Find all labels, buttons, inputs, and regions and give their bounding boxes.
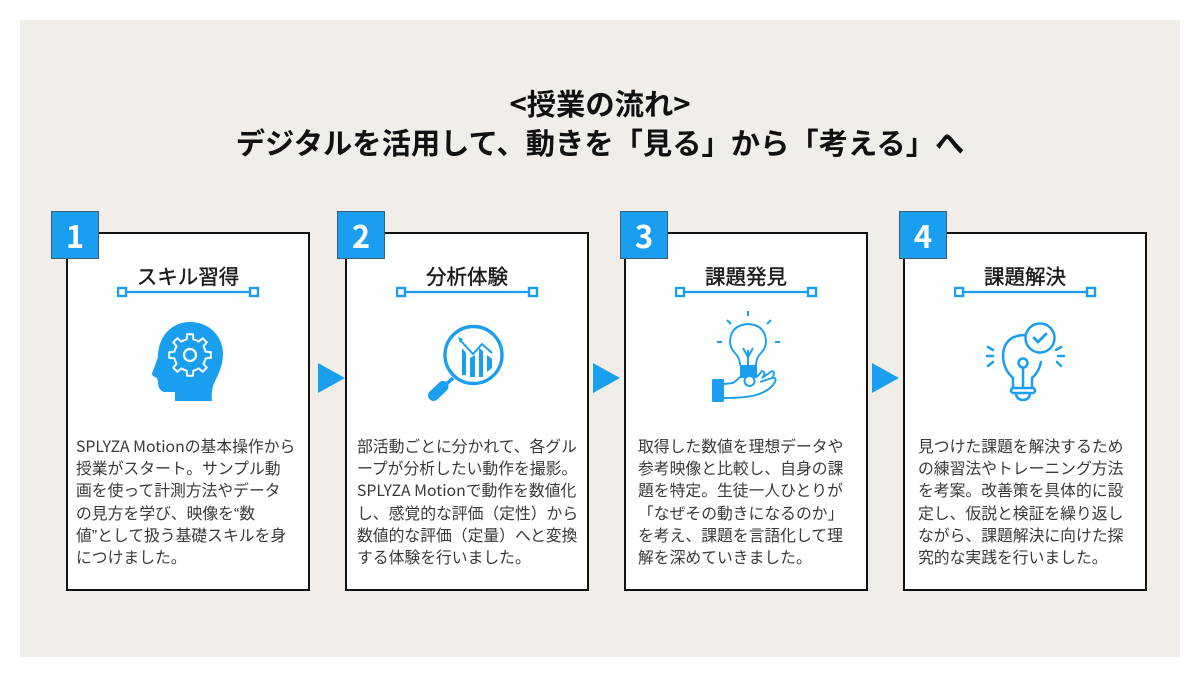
text: step 3: 取得した数値を理想データや (638, 434, 843, 457)
heading: step 4: 課題解決 (984, 260, 1066, 290)
text: step 1 (76, 434, 295, 568)
arrow: 1 to 2 (318, 363, 345, 393)
badge: 3 (620, 211, 668, 259)
heading: step 1: スキル習得 (137, 260, 239, 290)
heading: step 2: 分析体験 (426, 260, 508, 290)
text: step 1: の見方を学び、映像を“数 (76, 501, 255, 524)
panel: step 3 problem discovery (624, 232, 868, 591)
text: step 3: 題を特定。生徒一人ひとりが (638, 478, 843, 501)
text: step 3 (638, 434, 843, 568)
heading: step 3: 課題発見 (705, 260, 787, 290)
text: step 2: 部活動ごとに分かれて、各グル (357, 434, 577, 457)
text: step 4: 見つけた課題を解決するため (918, 434, 1123, 457)
heading rule: step 1 (117, 286, 260, 298)
badge: 2: 2 (352, 212, 370, 257)
text: step 2: SPLYZA Motionで動作を数値化 (357, 478, 576, 501)
badge: 2 (337, 211, 385, 259)
text: step 1: SPLYZA Motionの基本操作から (76, 434, 295, 457)
heading rule: step 4 (954, 286, 1096, 298)
text: step 2 (357, 434, 578, 568)
badge: 1 (51, 211, 99, 259)
text: step 1: 画を使って計測方法やデータ (76, 478, 281, 501)
title line 1: <授業の流れ> (509, 82, 691, 124)
title line 2: デジタルを活用して、動きを「見る」から「考える」へ (236, 121, 964, 163)
badge: 4: 4 (914, 212, 932, 257)
text: step 2: し、感覚的な評価（定性）から (357, 501, 578, 524)
text: step 3: を考え、課題を言語化して理 (638, 523, 843, 546)
text: step 2: ープが分析したい動作を撮影。 (357, 456, 577, 479)
text: step 4: 究的な実践を行いました。 (918, 545, 1108, 568)
text: step 4: を考案。改善策を具体的に設 (918, 478, 1123, 501)
badge: 4 (899, 211, 947, 259)
icon: light bulb in hand (712, 311, 780, 402)
text: step 1: につけました。 (76, 545, 187, 568)
panel: step 1 skill acquisition (66, 232, 310, 591)
text: step 4: ながら、課題解決に向けた探 (918, 523, 1123, 546)
icon: light bulb with check (986, 322, 1066, 402)
text: step 4 (918, 434, 1123, 568)
text: step 2: 数値的な評価（定量）へと変換 (357, 523, 577, 546)
heading rule: step 3 (675, 286, 818, 298)
badge: 1: 1 (66, 212, 84, 257)
text: step 2: する体験を行いました。 (357, 545, 531, 568)
text: step 1: 値”として扱う基礎スキルを身 (76, 523, 286, 546)
icon: magnifier with chart (428, 324, 504, 401)
text: step 4: の練習法やトレーニング方法 (918, 456, 1123, 479)
arrow: 3 to 4 (872, 363, 899, 393)
arrow: 2 to 3 (593, 363, 620, 393)
text: step 4: 定し、仮説と検証を繰り返し (918, 501, 1123, 524)
icon: head with gear (152, 322, 223, 401)
text: step 3: 解を深めていきました。 (638, 545, 812, 568)
text: step 3: 「なぜその動きになるのか」 (638, 501, 843, 524)
badge: 3: 3 (635, 212, 653, 257)
text: step 1: 授業がスタート。サンプル動 (76, 456, 281, 479)
heading rule: step 2 (396, 286, 538, 298)
panel: step 4 problem solving (903, 232, 1147, 591)
text: step 3: 参考映像と比較し、自身の課 (638, 456, 843, 479)
panel: step 2 analysis experience (345, 232, 589, 591)
